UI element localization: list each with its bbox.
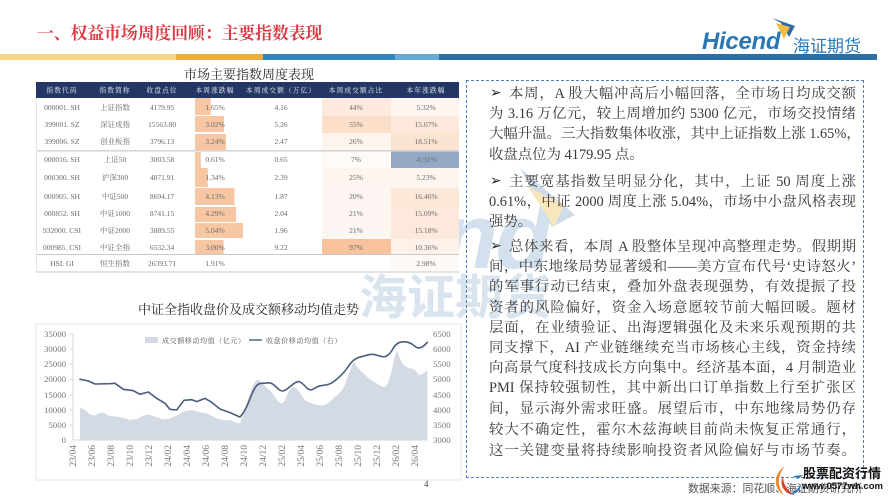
left axis	[44, 329, 427, 445]
right axis	[433, 329, 451, 445]
paragraph 3: 这一关键变量将持续影响投资者风险偏好与市场节奏。	[489, 443, 856, 459]
table body text: 5.04%	[205, 226, 225, 235]
title: 一、权益市场周度回顾：主要指数表现	[37, 24, 322, 43]
table body text: 3003.58	[150, 155, 174, 164]
table body text: 3.00%	[205, 243, 225, 252]
table body text: 2.04	[274, 209, 288, 218]
paragraph 3	[489, 238, 856, 459]
paragraph 3: 较大不确定性，霍尔木兹海峡目前尚未恢复正常通行，	[489, 422, 856, 438]
table body text: 16.46%	[414, 192, 438, 201]
table header row: 收盘点位	[146, 86, 178, 94]
table body text: 0.65	[274, 155, 288, 164]
table body text: 4.16	[274, 103, 288, 112]
logo	[702, 18, 861, 57]
table body text: 1.34%	[205, 173, 225, 182]
paragraph 3: ➢	[490, 239, 502, 254]
table body text: 4179.95	[150, 103, 174, 112]
table body text: 7%	[351, 155, 361, 164]
table body text: 8741.15	[150, 209, 174, 218]
table body text: 0.61%	[205, 155, 225, 164]
page number: 4	[424, 479, 428, 489]
x axis labels: 23/06	[88, 445, 98, 467]
table body text: 000852. SH	[44, 209, 80, 218]
table header row	[36, 82, 459, 98]
x axis labels: 24/02	[164, 445, 174, 467]
legend: 成交额移动均值（亿元）	[162, 336, 246, 345]
left axis: 35000	[44, 329, 67, 339]
closing price line	[80, 342, 427, 417]
chart heading: 中证全指收盘价及成交额移动均值走势	[138, 302, 359, 317]
x axis labels	[69, 445, 421, 467]
site watermark badge: 股票配资行情	[803, 463, 881, 482]
table body text: 5.26	[274, 120, 288, 129]
x axis labels: 23/08	[107, 445, 117, 467]
commentary panel	[466, 80, 864, 478]
table body text: 26393.71	[148, 259, 176, 268]
table body text: 上证指数	[100, 102, 130, 112]
table body text: 25%	[349, 173, 363, 182]
table body text: 97%	[349, 243, 363, 252]
site watermark badge	[776, 463, 883, 495]
right axis: 6500	[433, 329, 451, 339]
table body text	[43, 102, 438, 268]
table body text: 创业板指	[100, 136, 130, 146]
table body text: 2.39	[274, 173, 288, 182]
paragraph 1: 本周，A 股大幅冲高后小幅回落，全市场日均成交额	[509, 86, 856, 102]
chart: price and turnover	[36, 324, 462, 480]
heat cells and bars	[36, 98, 459, 273]
table body text: 1.96	[274, 226, 288, 235]
table body text: 399006. SZ	[44, 137, 80, 146]
table body text: 中证500	[102, 191, 128, 201]
right axis: 5000	[433, 374, 451, 384]
table body text: 5.23%	[416, 173, 436, 182]
paragraph 2: ➢	[490, 174, 502, 189]
paragraph 3: PMI 保持较强韧性，其中新出口订单指数上行至扩张区	[489, 380, 856, 396]
table body text: 6532.34	[150, 243, 174, 252]
table body text: 18.51%	[414, 137, 438, 146]
paragraph 1	[489, 86, 861, 163]
table body text: -0.91%	[415, 155, 437, 164]
table body text: 2.98%	[416, 259, 436, 268]
table body text: 深证成指	[100, 119, 130, 129]
table body text: 10.36%	[414, 243, 438, 252]
table body text: 1.87	[274, 192, 288, 201]
legend	[145, 336, 342, 345]
x axis labels: 25/06	[316, 445, 326, 467]
left axis: 30000	[44, 344, 67, 354]
paragraph 3: 同支撑下，AI 产业链继续充当市场核心主线，资金持续	[489, 340, 856, 356]
table body text: 21%	[349, 209, 363, 218]
x axis labels: 23/04	[69, 445, 79, 467]
paragraph 1: 收盘点位为 4179.95 点。	[489, 147, 644, 163]
table: index performance	[36, 82, 459, 273]
left axis: 5000	[48, 420, 67, 430]
x axis labels: 24/06	[202, 445, 212, 467]
logo: 海证期货	[793, 32, 861, 57]
left axis: 10000	[44, 405, 67, 415]
table body text: 上证50	[104, 154, 126, 164]
watermark: 海证期货	[359, 258, 551, 328]
table body text: 000905. SH	[44, 192, 80, 201]
table body text: 中证1000	[100, 208, 130, 218]
x axis labels: 24/12	[259, 445, 269, 467]
right axis: 5500	[433, 359, 451, 369]
x axis labels: 23/10	[126, 445, 136, 467]
left axis: 25000	[44, 359, 67, 369]
paragraph 3: 的军事行动已结束，叠加外盘表现强势，有效提振了投	[489, 279, 856, 295]
table body text: 15563.80	[148, 120, 176, 129]
table body text: 9.22	[274, 243, 288, 252]
x axis labels: 25/04	[297, 445, 307, 467]
table body text: 恒生指数	[100, 258, 130, 268]
watermark	[255, 168, 575, 328]
table body text: 26%	[349, 137, 363, 146]
table body text: 21%	[349, 226, 363, 235]
site watermark badge: www.0577wh.com	[802, 481, 883, 492]
left axis: 15000	[44, 390, 67, 400]
table body text: 8694.17	[150, 192, 174, 201]
table body text: 5.32%	[416, 103, 436, 112]
table body text: 20%	[349, 192, 363, 201]
x axis labels: 24/04	[183, 445, 193, 467]
paragraph 3: 资者的风险偏好，资金入场意愿较节前大幅回暖。题材	[489, 300, 856, 316]
table body text: 4.13%	[205, 192, 225, 201]
table body text: 沪深300	[102, 172, 128, 182]
paragraph 3: 总体来看，本周 A 股整体呈现冲高整理走势。假期期	[509, 239, 856, 255]
legend: 收盘价移动均值（右）	[266, 336, 342, 345]
table body text: 中证全指	[100, 242, 130, 252]
x axis labels: 24/10	[240, 445, 250, 467]
table body text: 15.07%	[414, 120, 438, 129]
left axis: 20000	[44, 374, 67, 384]
data source: 数据来源：同花顺、海证期货研究所	[688, 483, 862, 495]
right axis: 6000	[433, 344, 451, 354]
x axis labels: 23/12	[145, 445, 155, 467]
table body text: 3.24%	[205, 137, 225, 146]
x axis labels: 25/10	[354, 445, 364, 467]
x axis labels: 25/02	[278, 445, 288, 467]
left axis: 0	[62, 435, 67, 445]
paragraph 1: 为 3.16 万亿元，较上周增加约 5300 亿元，市场交投情绪	[489, 106, 856, 122]
table header row: 本年涨跌幅	[407, 86, 445, 94]
table body text: 000001. SH	[44, 103, 80, 112]
table body text: 399001. SZ	[44, 120, 80, 129]
table body text: 3889.55	[150, 226, 174, 235]
table header row: 本周成交额（万亿）	[246, 86, 316, 94]
paragraph 2: 0.61%，中证 2000 周度上涨 5.04%，市场中小盘风格表现	[489, 194, 856, 210]
table header row: 指数代码	[46, 86, 78, 94]
table header row: 本周涨跌幅	[196, 86, 234, 94]
watermark: Hicend	[255, 186, 550, 288]
table body text: 4871.91	[150, 173, 174, 182]
turnover area series	[80, 352, 427, 440]
paragraph 1: 大幅升温。三大指数集体收涨，其中上证指数上涨 1.65%，	[489, 126, 861, 142]
table body text: 中证2000	[100, 225, 130, 235]
table header row: 指数简称	[99, 86, 131, 94]
right axis: 4000	[433, 405, 451, 415]
right axis: 3500	[433, 420, 451, 430]
table body text: 55%	[349, 120, 363, 129]
logo: Hicend	[702, 28, 780, 55]
paragraph 2	[489, 174, 856, 230]
table body text: 000300. SH	[44, 173, 80, 182]
table body text: 932000. CSI	[43, 226, 81, 235]
table header row: 本周成交额占比	[329, 86, 383, 94]
header stripe	[0, 54, 877, 60]
paragraph 1: ➢	[490, 86, 502, 101]
x axis labels: 25/12	[373, 445, 383, 467]
right axis: 4500	[433, 390, 451, 400]
table body text: 000985. CSI	[43, 243, 81, 252]
paragraph 3: 间，中东地缘局势显著缓和——美方宣布代号‘史诗怒火’	[489, 259, 856, 275]
table body text: 3796.13	[150, 137, 174, 146]
table body text: 2.47	[274, 137, 288, 146]
table body text: 1.91%	[205, 259, 225, 268]
paragraph 3: 向高景气度科技成长方向集中。经济基本面，4 月制造业	[489, 360, 856, 376]
table heading: 市场主要指数周度表现	[184, 67, 314, 82]
table body text: 3.02%	[205, 120, 225, 129]
x axis labels: 25/08	[335, 445, 345, 467]
table body text: 000016. SH	[44, 155, 80, 164]
paragraph 2: 主要宽基指数呈明显分化，其中，上证 50 周度上涨	[509, 174, 856, 190]
x axis labels: 26/02	[392, 445, 402, 467]
table body text: 1.65%	[205, 103, 225, 112]
x axis labels: 24/08	[221, 445, 231, 467]
paragraph 3: 层面，在业绩验证、出海逻辑强化及未来乐观预期的共	[489, 320, 856, 336]
table body text: 44%	[349, 103, 363, 112]
right axis: 3000	[433, 435, 451, 445]
paragraph 3: 间，显示海外需求旺盛。展望后市，中东地缘局势仍存	[489, 401, 856, 417]
table body text: 4.29%	[205, 209, 225, 218]
table body text: HSI. GI	[50, 259, 74, 268]
paragraph 2: 强势。	[489, 214, 532, 230]
table body text: 15.18%	[414, 226, 438, 235]
x axis labels: 26/04	[411, 445, 421, 467]
table body text: 15.09%	[414, 209, 438, 218]
